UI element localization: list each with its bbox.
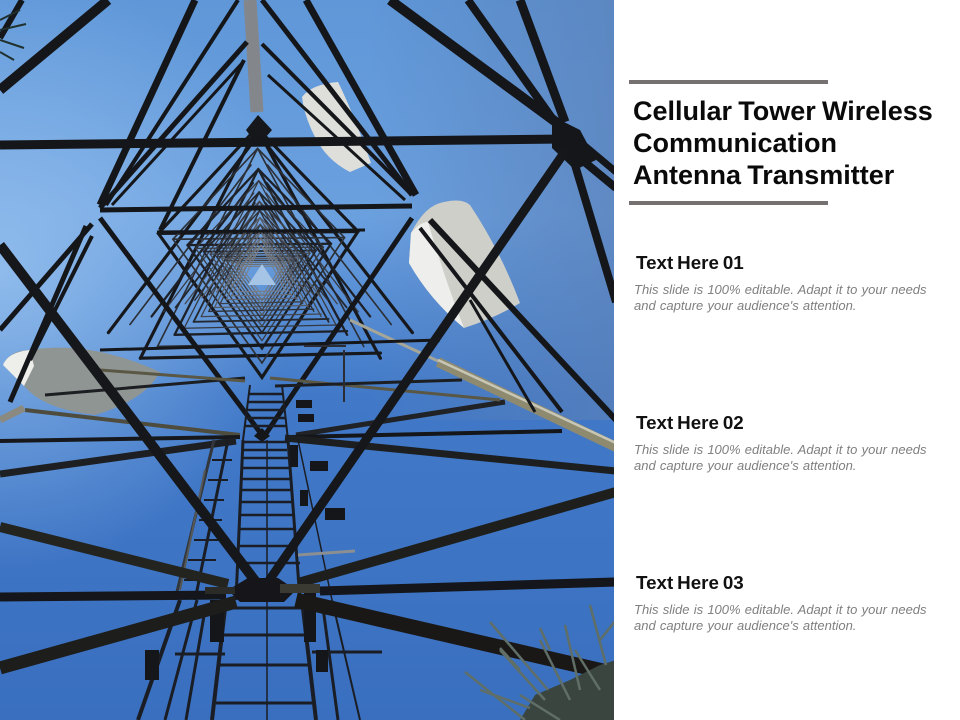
body 03: This slide is 100% editable. Adapt it to your needs	[634, 602, 927, 617]
antenna dish: upper	[302, 82, 371, 172]
text block 02	[634, 412, 927, 473]
body 03	[634, 602, 927, 633]
main tower beams: upper	[0, 0, 616, 435]
heading 03: Text Here 03	[636, 572, 744, 593]
body 02: and capture your audience's attention.	[634, 458, 856, 473]
text block 03	[634, 572, 927, 633]
fir tree: bottom right	[465, 605, 616, 720]
body 02: This slide is 100% editable. Adapt it to your needs	[634, 442, 927, 457]
tower-mounted equipment boxes	[145, 345, 346, 680]
text block 01	[634, 252, 927, 313]
title top rule	[629, 80, 828, 84]
heading 02: Text Here 02	[636, 412, 744, 433]
title: Antenna Transmitter	[633, 160, 894, 190]
fir tree: top left	[0, 10, 26, 60]
antenna dish: right	[409, 201, 520, 328]
antenna dish: left	[3, 348, 160, 415]
ladder and cables	[138, 385, 382, 720]
main V beams	[0, 150, 566, 582]
body 02	[634, 442, 927, 473]
main tower joints	[254, 116, 596, 442]
sky background	[0, 0, 614, 720]
body 01: This slide is 100% editable. Adapt it to your needs	[634, 282, 927, 297]
title	[633, 96, 933, 190]
title: Communication	[633, 128, 837, 158]
body 01	[634, 282, 927, 313]
body 01: and capture your audience's attention.	[634, 298, 856, 313]
title: Cellular Tower Wireless	[633, 96, 933, 126]
centre pole	[246, 0, 272, 146]
tan support pipe	[350, 320, 616, 447]
title bottom rule	[629, 201, 828, 205]
body 03: and capture your audience's attention.	[634, 618, 856, 633]
nested tower lattice converging to the vanishing point	[108, 128, 412, 377]
lower spokes and hub	[0, 492, 616, 674]
heading 01: Text Here 01	[636, 252, 744, 273]
cross braces at lower ring	[0, 370, 616, 474]
photo: cellular tower seen from below against blue sky	[0, 0, 614, 720]
